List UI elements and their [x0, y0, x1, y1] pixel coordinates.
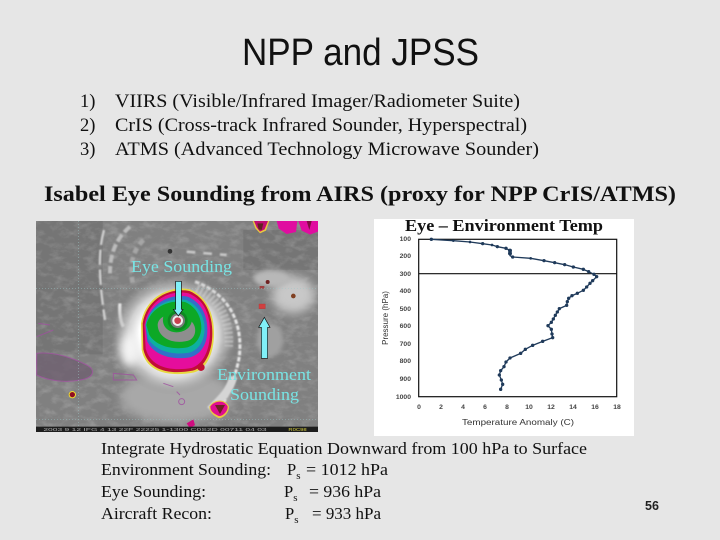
sounding curve [430, 238, 598, 391]
temperature anomaly chart [374, 219, 634, 436]
surface pressure results: Eye Sounding: [101, 482, 206, 501]
arrow: eye sounding [173, 281, 183, 316]
instrument list: 2) [80, 116, 95, 136]
satellite image of hurricane Isabel [36, 221, 318, 432]
surface pressure results: Environment Sounding: [101, 460, 271, 479]
surface pressure results: = 933 hPa [312, 504, 382, 523]
arrow: environment sounding [259, 317, 270, 358]
instrument list: VIIRS (Visible/Infrared Imager/Radiometer Suite) [115, 92, 520, 112]
pressure axis tick labels: 900 [400, 376, 411, 383]
pressure axis tick labels: 600 [400, 323, 411, 330]
pressure axis tick labels: 1000 [396, 394, 411, 401]
eye marker [174, 317, 181, 324]
pressure axis tick labels: 100 [400, 236, 411, 243]
surface pressure results: s [296, 470, 300, 482]
label: environment sounding: Sounding [230, 385, 299, 404]
label: eye sounding: Eye Sounding [131, 257, 232, 276]
axis title: temperature: Temperature Anomaly (C) [462, 418, 574, 427]
title: NPP and JPSS [242, 32, 479, 74]
label: environment sounding [217, 365, 311, 404]
temperature axis tick labels: 14 [569, 404, 577, 411]
scattered magenta cloud tops [69, 221, 318, 428]
temperature axis tick labels: 2 [439, 404, 443, 411]
temperature axis tick labels: 12 [547, 404, 555, 411]
axis title: pressure: Pressure (hPa) [381, 291, 390, 345]
surface pressure results: s [293, 492, 297, 504]
temperature axis tick labels: 6 [483, 404, 487, 411]
temperature axis tick labels: 0 [417, 404, 421, 411]
surface pressure results: = 936 hPa [309, 482, 382, 501]
environment sounding marker [259, 304, 265, 309]
image status bar [36, 427, 318, 432]
temperature axis tick labels: 18 [613, 404, 621, 411]
surface pressure results: P [284, 482, 293, 501]
pressure axis tick labels: 500 [400, 306, 411, 313]
slide number: 56 [645, 499, 659, 513]
temperature axis tick labels: 4 [461, 404, 465, 411]
temperature axis tick labels: 8 [505, 404, 509, 411]
image status bar: R0C98 [288, 427, 307, 432]
surface pressure results: Aircraft Recon: [101, 504, 212, 523]
lat-lon grid [36, 221, 318, 427]
instrument list [80, 92, 539, 160]
pressure axis tick labels: 300 [400, 271, 411, 278]
temperature axis tick labels: 16 [591, 404, 599, 411]
pink coastlines [37, 323, 185, 405]
surface pressure results: P [287, 460, 296, 479]
temperature axis tick labels [417, 404, 621, 411]
temperature axis tick labels: 10 [525, 404, 533, 411]
image status bar: 2003 9 12 IFG 4 13 22F 22225 1-1300 C0S2D 00711 04 03 [43, 427, 268, 432]
pressure axis tick labels [396, 236, 411, 401]
pressure axis tick labels: 800 [400, 358, 411, 365]
surface pressure results: P [285, 504, 294, 523]
pressure axis tick labels: 400 [400, 288, 411, 295]
chart heading: Eye – Environment Temp [405, 216, 603, 235]
instrument list: CrIS (Cross-track Infrared Sounder, Hyperspectral) [115, 116, 527, 136]
surface pressure results: s [294, 514, 298, 526]
surface pressure results: Integrate Hydrostatic Equation Downward from 100 hPa to Surface [101, 439, 587, 458]
storm cloud shield [141, 288, 214, 374]
pressure axis tick labels: 700 [400, 341, 411, 348]
instrument list: ATMS (Advanced Technology Microwave Sounder) [115, 140, 539, 160]
label: environment sounding: Environment [217, 365, 311, 384]
chart frame [419, 239, 617, 397]
instrument list: 1) [80, 92, 95, 112]
chart panel [374, 219, 634, 436]
section heading: Isabel Eye Sounding from AIRS (proxy for NPP CrIS/ATMS) [44, 181, 676, 206]
spiral cloud bands [100, 227, 240, 410]
surface pressure results [101, 439, 587, 526]
pressure axis tick labels: 200 [400, 253, 411, 260]
surface pressure results: = 1012 hPa [306, 460, 389, 479]
instrument list: 3) [80, 140, 95, 160]
